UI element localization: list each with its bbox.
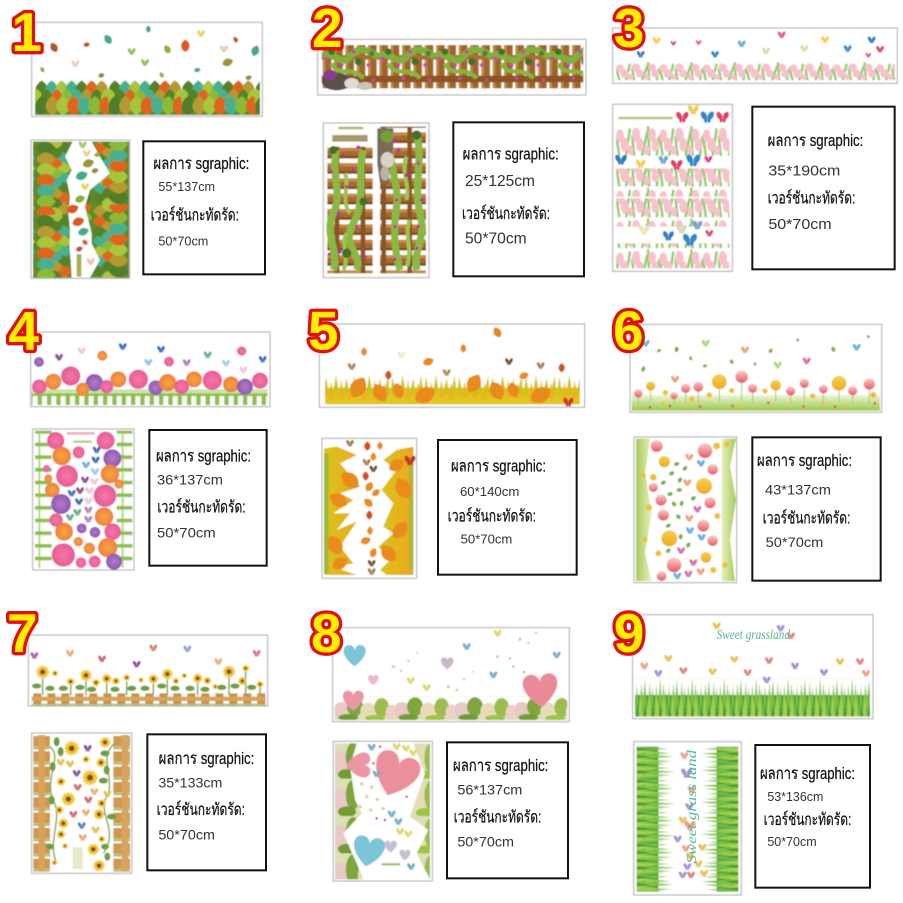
compact value: 50*70cm — [158, 235, 208, 249]
compact label: เวอร์ชันกะทัดรัด: — [462, 204, 550, 223]
compact label: เวอร์ชันกะทัดรัด: — [448, 507, 536, 526]
compact label: เวอร์ชันกะทัดรัด: — [768, 188, 855, 207]
regular size label: ผลการ sgraphic: — [451, 457, 546, 476]
compact value: 50*70cm — [461, 532, 512, 546]
compact value: 50*70cm — [457, 835, 514, 850]
portrait image: leaf sheet — [31, 140, 130, 278]
regular size value: 53*136cm — [767, 790, 823, 804]
panel 3: pink tulips — [613, 0, 897, 271]
size box — [755, 745, 870, 888]
regular size label: ผลการ sgraphic: — [760, 764, 855, 783]
regular size label: ผลการ sgraphic: — [153, 154, 249, 173]
compact label: เวอร์ชันกะทัดรัด: — [157, 497, 246, 516]
compact label: เวอร์ชันกะทัดรัด: — [157, 800, 245, 819]
compact label: เวอร์ชันกะทัดรัด: — [764, 810, 851, 829]
regular size value: 25*125cm — [465, 173, 535, 190]
compact label: เวอร์ชันกะทัดรัด: — [763, 508, 850, 527]
regular size label: ผลการ sgraphic: — [768, 131, 863, 150]
regular size value: 56*137cm — [457, 782, 522, 797]
portrait image: fence sheet — [323, 123, 429, 278]
banner image: hydrangea border — [31, 332, 270, 407]
compact label: เวอร์ชันกะทัดรัด: — [454, 807, 541, 826]
size box — [453, 122, 584, 276]
number badge 8: 8 — [311, 602, 342, 664]
portrait image: golden grass sheet — [322, 438, 417, 578]
compact value: 50*70cm — [766, 534, 823, 550]
panel 9: sweet grassland — [614, 602, 873, 895]
panel 2: wooden fence with vines — [312, 0, 586, 278]
banner image: tulip border — [613, 28, 897, 83]
regular size value: 55*137cm — [158, 180, 215, 194]
number badge 6: 6 — [613, 300, 644, 362]
panel 4: hydrangea balls — [8, 300, 270, 570]
regular size label: ผลการ sgraphic: — [159, 749, 254, 768]
compact value: 50*70cm — [157, 524, 216, 540]
panel 6: tulips and meadow — [613, 300, 882, 583]
banner image: meadow border — [630, 324, 882, 412]
size box — [752, 107, 895, 269]
regular size label: ผลการ sgraphic: — [463, 144, 559, 163]
panel 5: autumn grass — [308, 300, 585, 578]
portrait image: meadow sheet — [634, 437, 737, 583]
banner image: fence border — [318, 39, 586, 95]
compact value: 50*70cm — [768, 217, 832, 233]
banner image: sunflower border — [28, 635, 268, 706]
regular size value: 36*137cm — [157, 471, 223, 487]
portrait image: heart sheet — [333, 741, 432, 881]
portrait image: hydrangea sheet — [33, 429, 134, 570]
regular size label: ผลการ sgraphic: — [156, 446, 251, 465]
compact value: 50*70cm — [767, 835, 817, 849]
size box — [143, 141, 265, 274]
panel 7: sunflowers and fence — [7, 602, 268, 873]
number badge 9: 9 — [614, 602, 644, 664]
size box — [752, 437, 881, 581]
banner image: golden grass border — [319, 324, 585, 407]
banner image: leaf border — [32, 22, 262, 116]
regular size label: ผลการ sgraphic: — [453, 756, 548, 775]
size box — [149, 430, 267, 566]
panel 1: leaves — [11, 1, 265, 278]
regular size value: 35*190cm — [768, 164, 840, 180]
banner image: heart border — [333, 628, 569, 722]
number badge 5: 5 — [308, 300, 339, 362]
portrait image: grass sheet — [634, 742, 741, 895]
number badge 4: 4 — [8, 300, 39, 362]
compact value: 50*70cm — [465, 230, 527, 247]
size box — [438, 440, 577, 575]
banner script title: Sweet grassland — [717, 628, 791, 643]
portrait image: tulip sheet — [613, 104, 732, 271]
compact label: เวอร์ชันกะทัดรัด: — [151, 206, 239, 225]
banner image: grass border — [633, 615, 873, 719]
compact value: 50*70cm — [158, 827, 215, 842]
regular size label: ผลการ sgraphic: — [757, 451, 852, 470]
size box — [447, 742, 568, 878]
number badge 1: 1 — [11, 1, 42, 63]
size box — [147, 734, 266, 870]
portrait image: sunflower sheet — [32, 733, 132, 873]
panel 8: hearts and trees — [311, 602, 569, 881]
portrait script title: Sweet grass land — [685, 749, 700, 863]
number badge 7: 7 — [7, 602, 38, 664]
regular size value: 60*140cm — [460, 485, 519, 499]
regular size value: 35*133cm — [158, 776, 222, 791]
regular size value: 43*137cm — [765, 481, 831, 497]
